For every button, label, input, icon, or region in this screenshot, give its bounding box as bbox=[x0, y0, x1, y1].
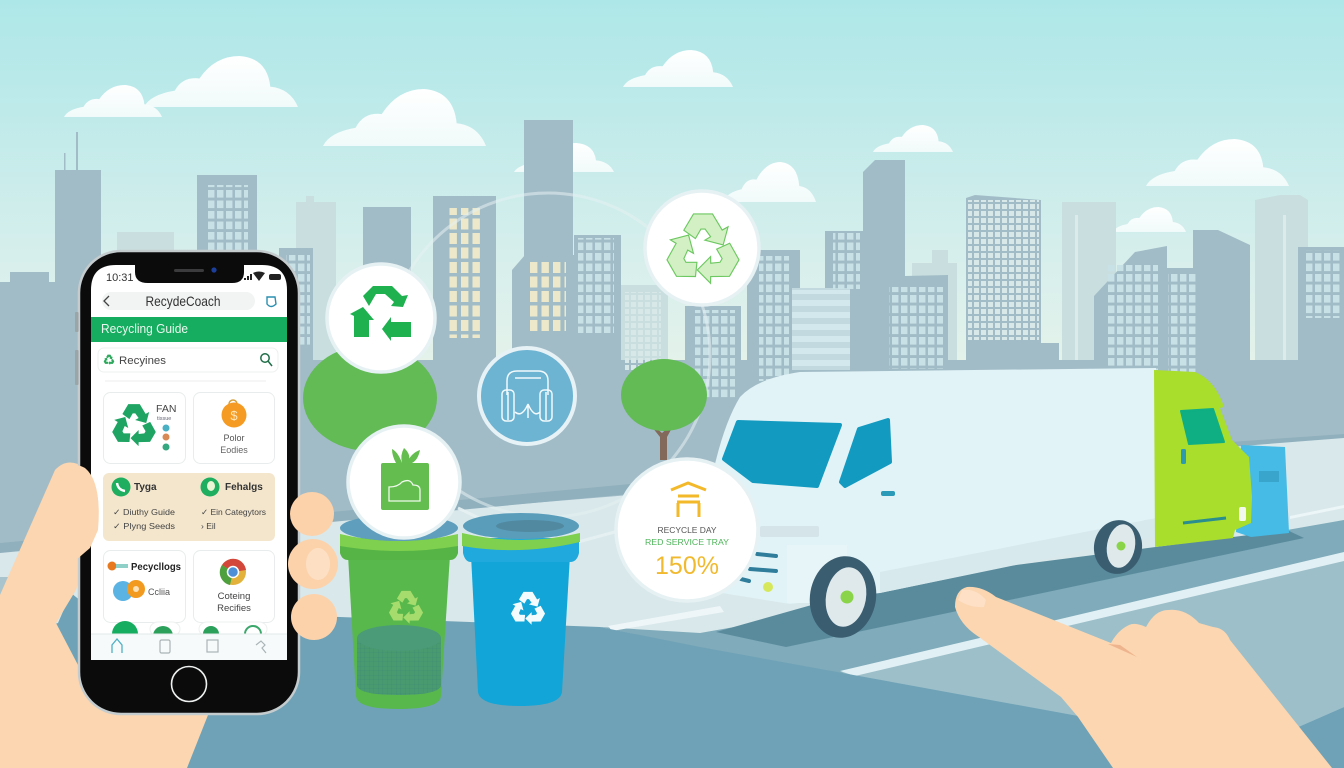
screen bbox=[91, 265, 287, 660]
lane marking bbox=[840, 552, 1344, 676]
clouds bbox=[64, 50, 1289, 232]
green guide banner: Recycling Guide bbox=[101, 322, 188, 336]
van shadow bbox=[716, 530, 1304, 647]
rear wheel bbox=[1090, 516, 1146, 578]
front wheel bbox=[803, 551, 883, 643]
kerb line bbox=[0, 434, 1344, 553]
distant pale towers bbox=[117, 195, 1308, 380]
search box: Recyines bbox=[119, 355, 167, 367]
partial lower row icons bbox=[112, 621, 267, 647]
beige tips panel: › Eil bbox=[201, 521, 216, 531]
app title bar bbox=[102, 292, 276, 310]
background sky bbox=[0, 0, 1344, 380]
card: coin: $ bbox=[230, 408, 238, 423]
lower body band bbox=[880, 518, 1156, 593]
headlight bbox=[763, 582, 773, 592]
gold shelter icon bbox=[671, 483, 706, 517]
cab window bbox=[1181, 409, 1224, 444]
status bar bbox=[106, 272, 281, 284]
right hand pointing bbox=[955, 587, 1332, 768]
card: recycling: FAN bbox=[156, 403, 176, 415]
beige tips panel: ✓ Plyng Seeds bbox=[113, 521, 175, 531]
foreground pavement bbox=[0, 593, 1344, 768]
lime cab bbox=[1154, 370, 1252, 547]
app title bar: RecydeCoach bbox=[146, 293, 220, 309]
road surface bbox=[600, 520, 1344, 717]
search box bbox=[98, 348, 278, 372]
main towers bbox=[0, 120, 1344, 550]
side window bbox=[841, 420, 890, 486]
notch bbox=[135, 265, 244, 283]
blue recycling bin bbox=[462, 513, 580, 706]
side buttons bbox=[75, 312, 78, 385]
status bar: 10:31 bbox=[106, 272, 134, 284]
phone body bbox=[79, 251, 299, 714]
card: recycling bbox=[104, 392, 186, 464]
sidewalk and street bbox=[0, 434, 1344, 768]
knuckle crease bbox=[1108, 644, 1137, 657]
card: recyclings bbox=[104, 550, 186, 622]
left thumb bbox=[70, 465, 99, 560]
van body bbox=[700, 368, 1156, 604]
blue rear container bbox=[1236, 445, 1289, 537]
icon bubble: green arrows bbox=[327, 264, 435, 372]
icon bubble: statistic bbox=[616, 459, 758, 601]
icon bubble: blue outline device bbox=[479, 348, 575, 444]
card: coin bbox=[194, 392, 274, 464]
left hand palm bbox=[0, 462, 210, 768]
smartphone bbox=[75, 251, 299, 714]
card: coin: Eodies bbox=[220, 445, 248, 455]
statistic caption: RECYCLE DAY bbox=[658, 526, 717, 535]
green guide banner bbox=[91, 317, 287, 342]
beige tips panel: Tyga bbox=[134, 482, 157, 493]
card: coin: Polor bbox=[223, 433, 245, 443]
near lane bbox=[840, 558, 1344, 735]
bin recycle symbol bbox=[507, 592, 547, 628]
card: recyclings: Pecycllogs bbox=[131, 561, 181, 573]
statistic value: 150% bbox=[655, 552, 719, 580]
icon bubble: green bag bbox=[348, 426, 460, 538]
beige tips panel: ✓ Ein Categytors bbox=[201, 507, 266, 517]
beige tips panel bbox=[103, 473, 275, 541]
building windows bbox=[208, 185, 248, 255]
door handle bbox=[881, 491, 895, 496]
city skyline bbox=[0, 120, 1344, 550]
fingers gripping phone bbox=[288, 492, 338, 640]
bottom navigation bar bbox=[91, 634, 287, 660]
sidewalk bbox=[0, 436, 1344, 768]
tree: small bbox=[621, 359, 707, 460]
beige tips panel: Fehalgs bbox=[225, 482, 263, 493]
icon bubble: statistic: RED SERVICE TRAY bbox=[645, 537, 729, 547]
home button bbox=[172, 666, 206, 702]
front grille lines bbox=[741, 554, 776, 581]
green recycling bin bbox=[340, 515, 458, 709]
tree: large bbox=[303, 345, 437, 451]
card: recycling: tissue bbox=[157, 416, 171, 422]
bin recycle symbol bbox=[385, 591, 425, 627]
cab details bbox=[1181, 449, 1246, 523]
basket inside bin bbox=[357, 625, 441, 695]
delivery van bbox=[700, 368, 1289, 643]
card: cooking: Coteing bbox=[218, 591, 250, 602]
icon bubble: light recycle bbox=[645, 191, 759, 305]
card: recyclings: Ccliia bbox=[148, 587, 170, 597]
fingernail bbox=[958, 590, 986, 607]
windshield bbox=[724, 422, 840, 486]
card: cooking bbox=[194, 550, 274, 622]
beige tips panel: ✓ Diuthy Guide bbox=[113, 507, 175, 517]
orbit connector ring bbox=[386, 193, 710, 542]
card: cooking: Recifies bbox=[217, 603, 251, 614]
